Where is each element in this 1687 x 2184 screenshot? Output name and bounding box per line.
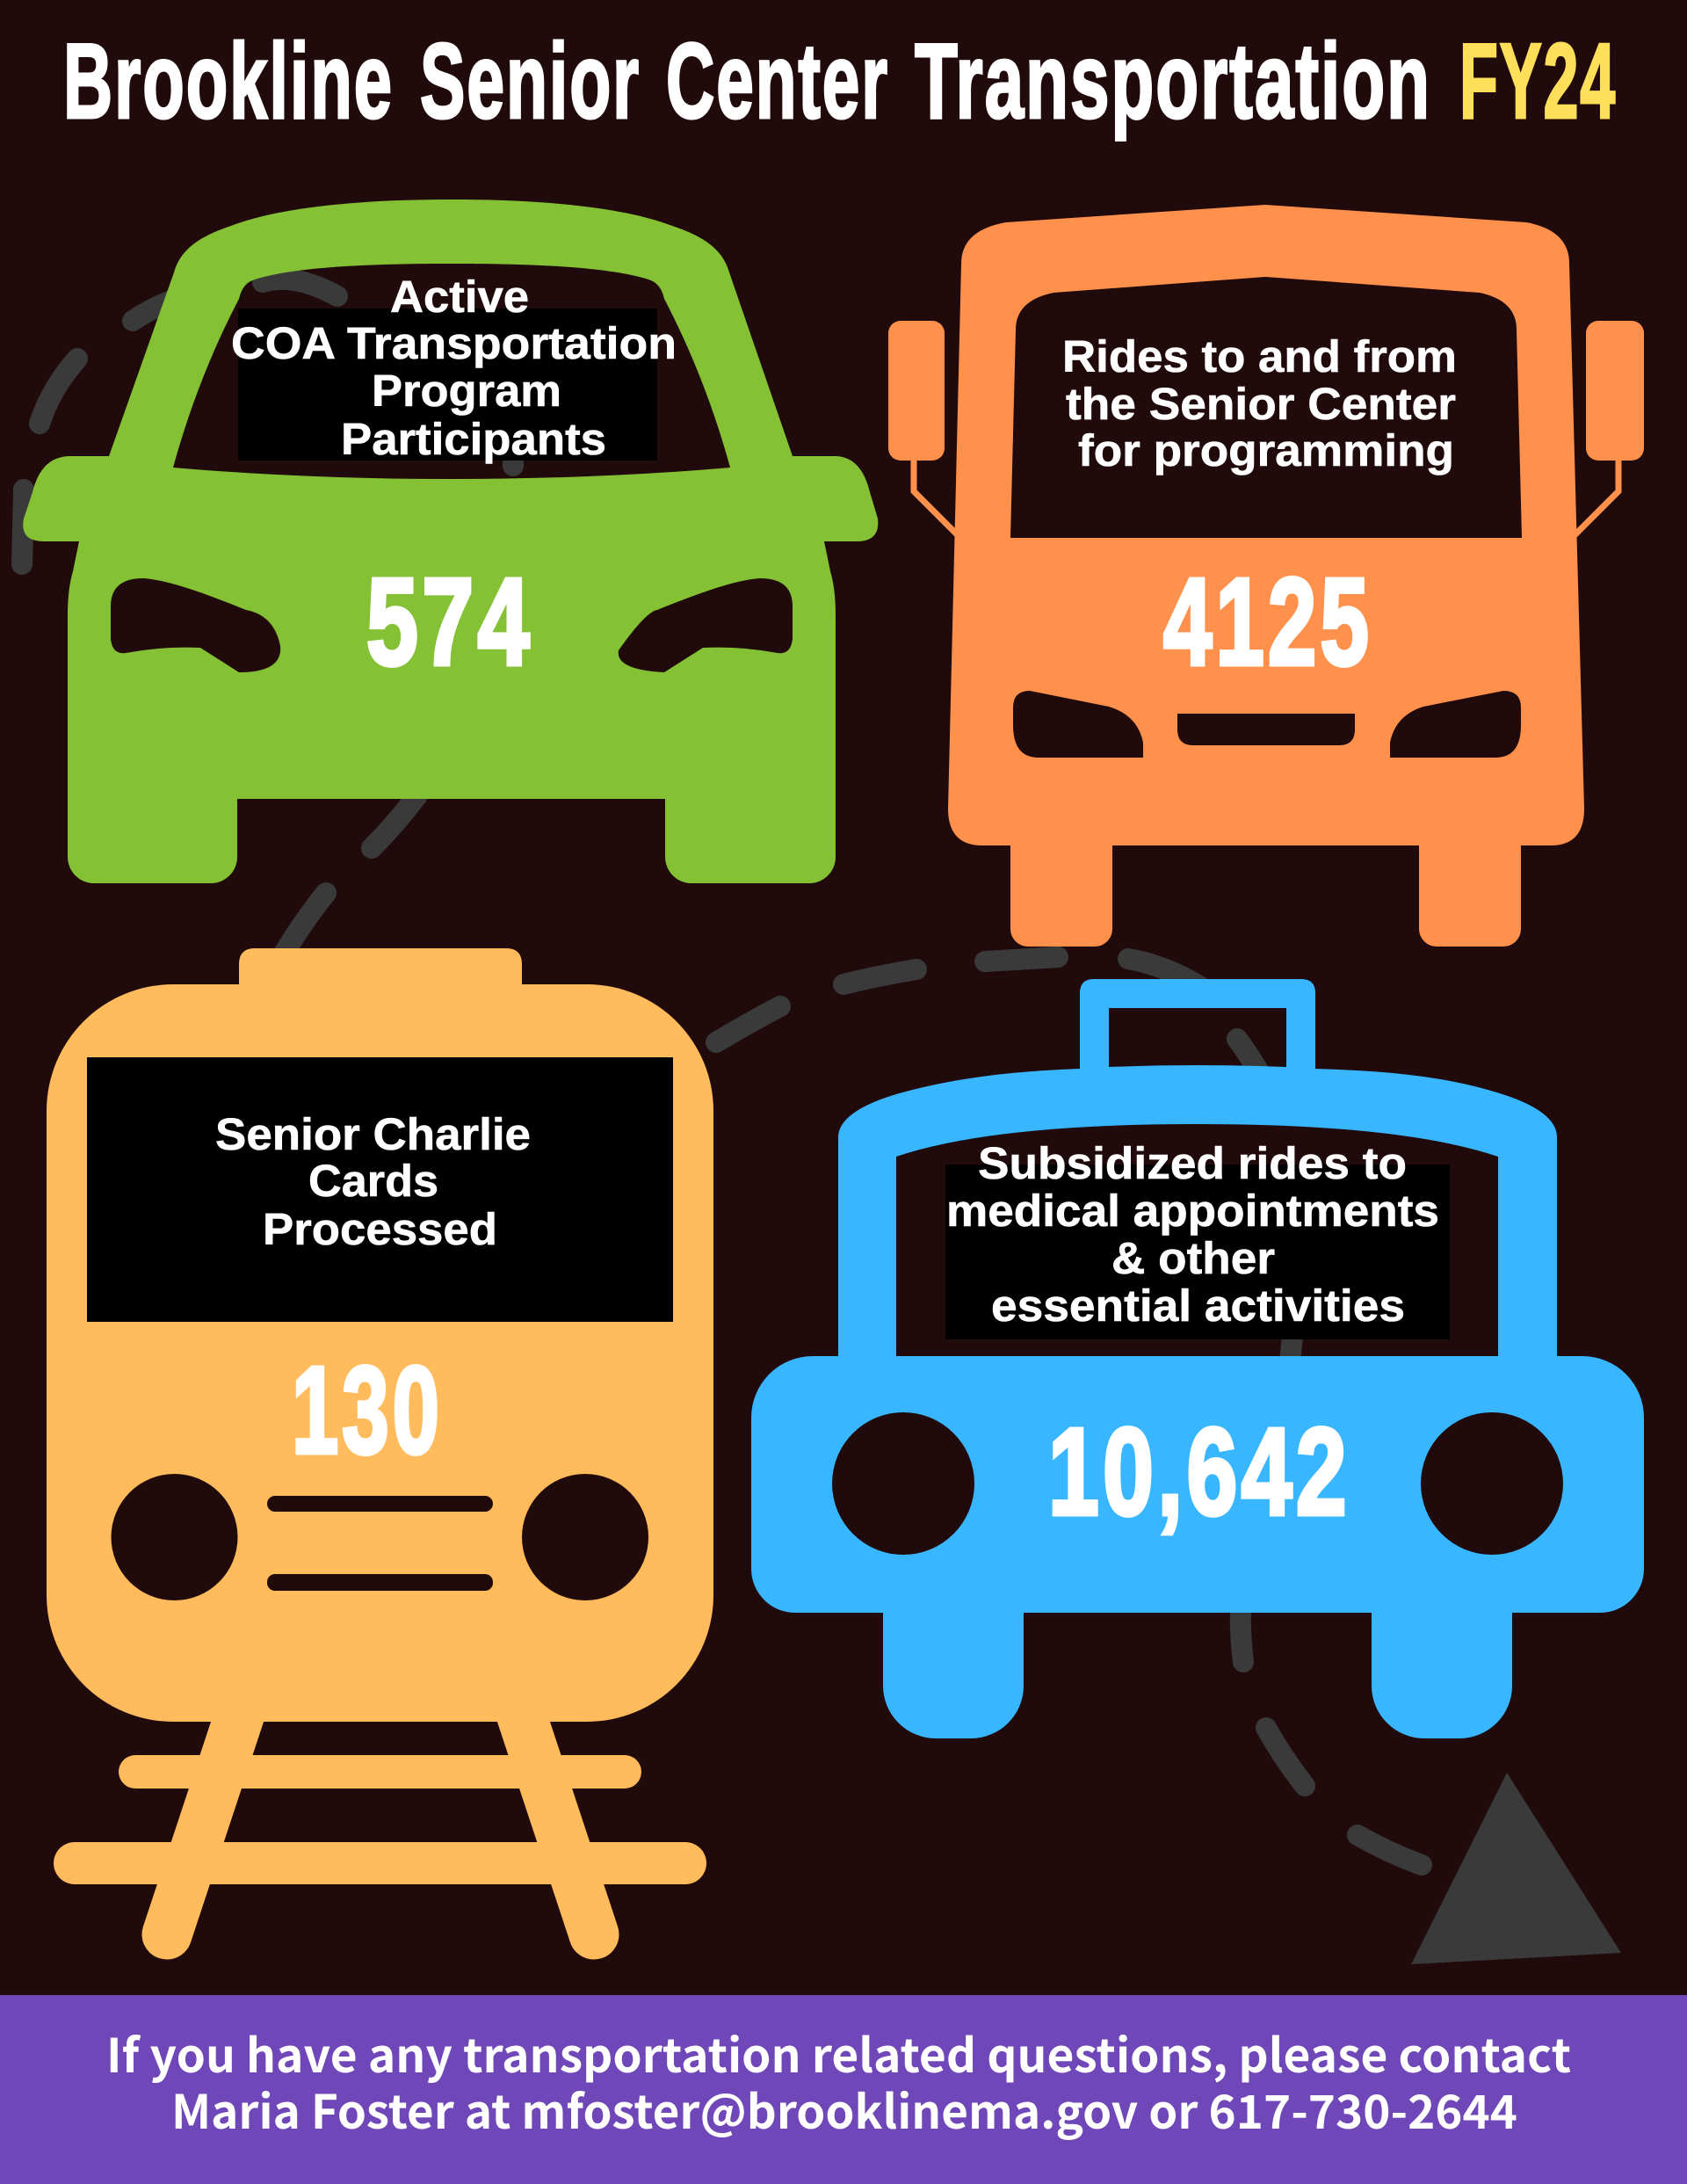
car headlight right: [619, 578, 793, 672]
car label: Program: [372, 366, 561, 416]
footer contact text: [106, 2020, 1571, 2143]
icon: blue taxi: [751, 979, 1644, 1738]
bus grille: [1177, 714, 1355, 745]
train headlight left: [111, 1474, 237, 1600]
panel: train, Senior Charlie Cards: [47, 948, 713, 1934]
car label: COA Transportation: [231, 318, 677, 368]
number: 130: 130: [292, 1340, 443, 1479]
car label: Active: [390, 272, 529, 322]
arrowhead triangle: [1411, 1773, 1621, 1964]
train headlight right: [522, 1474, 648, 1600]
car label: Participants: [341, 414, 606, 464]
car headlight left: [111, 578, 280, 672]
train grille: [267, 1496, 493, 1591]
icon: bus mirrors: [888, 321, 1644, 535]
car label: [231, 272, 677, 464]
title: Center: [666, 21, 889, 141]
number: 574: 574: [366, 552, 533, 691]
taxi label: [946, 1138, 1439, 1331]
train label: Senior Charlie: [215, 1109, 531, 1159]
bus label: [1062, 331, 1457, 475]
car window label backing: [238, 308, 657, 461]
taxi window label backing: [945, 1165, 1450, 1339]
bus label: the Senior Center: [1066, 379, 1456, 429]
icon: orange bus: [948, 205, 1584, 947]
title: Senior: [420, 21, 641, 141]
icon: green car: [23, 200, 878, 883]
number: 4125: 4125: [1163, 552, 1372, 691]
taxi headlight left: [832, 1412, 974, 1555]
bus label: Rides to and from: [1062, 331, 1457, 381]
train label: [215, 1109, 531, 1254]
train window: [87, 1057, 673, 1322]
panel: taxi, subsidized rides: [751, 979, 1644, 1738]
taxi label: medical appointments: [946, 1186, 1439, 1236]
taxi label: essential activities: [991, 1281, 1405, 1331]
number: 10,642: 10,642: [1048, 1402, 1350, 1541]
panel: bus, rides to senior center: [888, 205, 1644, 947]
icon: yellow train: [47, 948, 713, 1934]
taxi headlight right: [1421, 1412, 1563, 1555]
train label: Cards: [308, 1156, 438, 1206]
footer contact text: Maria Foster at mfoster@brooklinema.gov or 617-730-2644: [171, 2076, 1517, 2143]
bus label: for programming: [1078, 425, 1454, 475]
footer band: [0, 1995, 1687, 2184]
bus headlight left: [1013, 691, 1143, 758]
title: [63, 21, 1617, 141]
bus headlight right: [1390, 691, 1521, 758]
taxi label: Subsidized rides to: [978, 1138, 1407, 1188]
taxi label: & other: [1111, 1233, 1275, 1283]
footer contact text: If you have any transportation related questions, please contact: [106, 2020, 1571, 2086]
dashed route line: [22, 279, 1422, 1865]
title: Transportation: [915, 21, 1431, 141]
train label: Processed: [263, 1204, 497, 1254]
panel: car, COA participants: [23, 200, 878, 883]
title: Brookline: [63, 21, 394, 141]
